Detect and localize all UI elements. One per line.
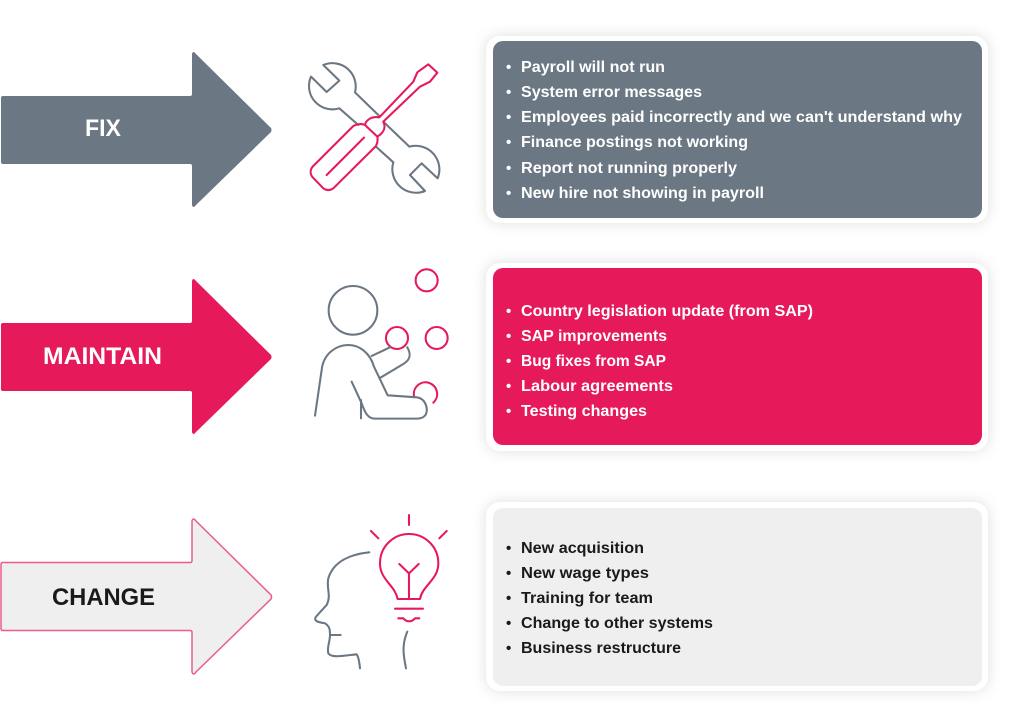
panel: change list: Change to other systems (521, 615, 713, 632)
panel: fix list: Employees paid incorrectly and we can't understand why (521, 109, 962, 126)
panel: fix list: Finance postings not working (521, 134, 748, 151)
panel: maintain list: Labour agreements (521, 378, 673, 395)
panel: maintain list: • (506, 378, 511, 395)
panel: change list: Business restructure (521, 640, 681, 657)
panel: change list: • (506, 615, 511, 632)
icon: wrench and screwdriver (309, 63, 439, 193)
arrow: FIX: FIX (85, 115, 121, 142)
panel: change list: • (506, 565, 511, 582)
panel: maintain list: • (506, 403, 511, 420)
panel: maintain list: Country legislation update (from SAP) (521, 303, 813, 320)
panel: fix list: • (506, 109, 511, 126)
arrow: CHANGE: CHANGE (52, 584, 155, 611)
panel: fix list: New hire not showing in payroll (521, 185, 764, 202)
panel: fix list: • (506, 134, 511, 151)
panel: change list (486, 502, 988, 691)
panel: maintain list: Testing changes (521, 403, 647, 420)
arrow: FIX (1, 52, 272, 207)
panel: maintain list: • (506, 328, 511, 345)
panel: change list: New acquisition (521, 540, 644, 557)
panel: maintain list: • (506, 353, 511, 370)
arrow: MAINTAIN (1, 279, 272, 434)
panel: fix list: • (506, 59, 511, 76)
panel: fix list: • (506, 84, 511, 101)
panel: fix list: • (506, 185, 511, 202)
panel: maintain list (486, 263, 988, 451)
panel: change list: Training for team (521, 590, 653, 607)
icon: head with light bulb (315, 515, 447, 668)
arrow: MAINTAIN: MAINTAIN (43, 343, 162, 370)
panel: maintain list: • (506, 303, 511, 320)
panel: change list: • (506, 640, 511, 657)
panel: fix list: System error messages (521, 84, 702, 101)
arrow: CHANGE (1, 519, 272, 674)
panel: fix list: Report not running properly (521, 160, 737, 177)
panel: maintain list: SAP improvements (521, 328, 667, 345)
panel: fix list (486, 36, 988, 223)
panel: change list: New wage types (521, 565, 649, 582)
panel: change list: • (506, 540, 511, 557)
panel: maintain list: Bug fixes from SAP (521, 353, 666, 370)
icon: person juggling (315, 269, 448, 419)
panel: fix list: Payroll will not run (521, 59, 665, 76)
panel: change list: • (506, 590, 511, 607)
panel: fix list: • (506, 160, 511, 177)
